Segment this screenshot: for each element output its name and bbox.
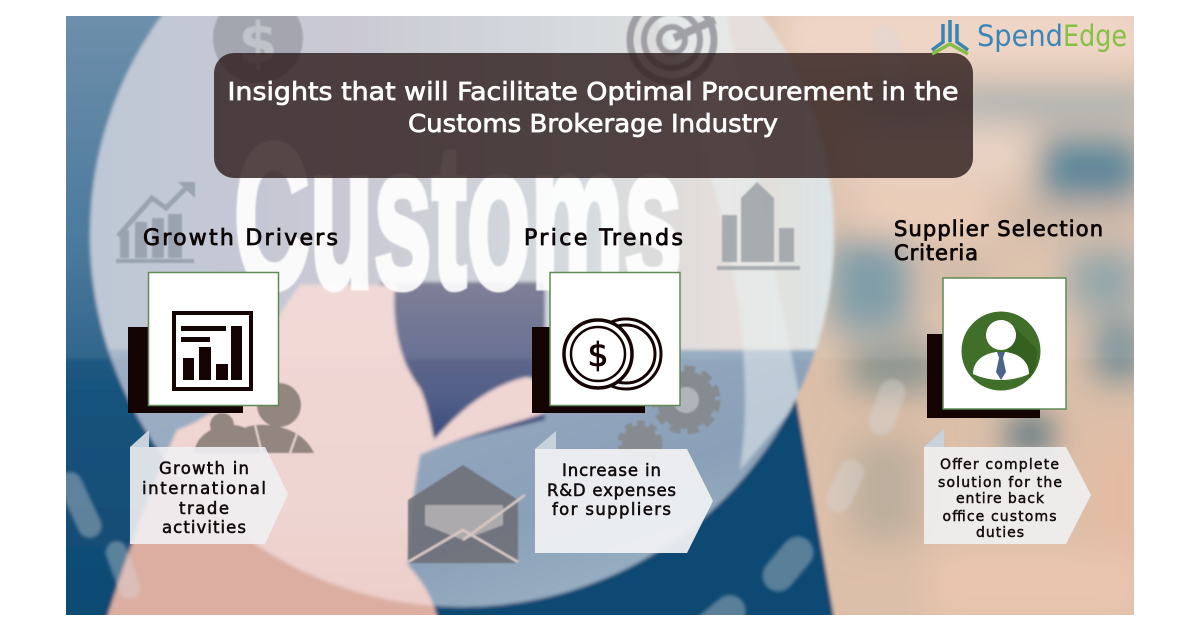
hand seen through the dial: [166, 282, 548, 608]
hand outside the dial: [104, 461, 441, 615]
faded icon: gears: [620, 369, 717, 463]
upper lighter band of the photo: [50, 0, 1150, 359]
SpendEdge logo: Spend: [977, 19, 1063, 53]
dial circle: [80, 0, 850, 627]
title text: Insights that will Facilitate Optimal Procurement in the: [228, 77, 958, 106]
callout: selection criteria: duties: [976, 525, 1024, 541]
column: Growth Drivers: [128, 226, 338, 544]
callout: growth driver: international: [142, 479, 266, 498]
card shadow block: [927, 334, 1040, 418]
heading: Supplier Selection Criteria: [894, 217, 1103, 265]
callout: price trend: [535, 431, 713, 553]
callout: price trend: Increase in: [562, 461, 661, 480]
faded icon: growth chart: [116, 182, 195, 263]
heading: Supplier Selection Criteria: Criteria: [894, 241, 978, 265]
suit seen through the dial: [380, 282, 545, 445]
callout: selection criteria: entire back: [956, 491, 1045, 507]
faded icon: target: [630, 0, 715, 82]
callout: growth driver: activities: [162, 518, 246, 537]
column: Price Trends: [524, 226, 713, 553]
callout: price trend: for suppliers: [552, 500, 671, 519]
title banner: [214, 53, 973, 178]
callout: growth driver: Growth in: [159, 459, 249, 478]
callout: selection criteria: [924, 429, 1091, 544]
card shadow block: [128, 327, 243, 413]
icon: dollar coins: $: [588, 335, 608, 374]
icon card: [148, 272, 278, 406]
callout: growth driver: [130, 430, 288, 544]
SpendEdge logo: [932, 19, 1127, 54]
title text: [228, 77, 958, 138]
pale streaks on the right of the dial: [658, 16, 800, 470]
title text: Customs Brokerage Industry: [408, 109, 778, 138]
faded icon: office building: [717, 182, 800, 270]
heading: Price Trends: Price Trends: [524, 226, 683, 251]
big customs word: Customs: [234, 102, 682, 331]
decorative capsules: [54, 23, 909, 627]
icon: supplier person: [962, 312, 1040, 390]
callout: price trend: R&D expenses: [547, 481, 676, 500]
callout: selection criteria: office customs: [942, 509, 1056, 525]
callout: selection criteria: Offer complete: [940, 457, 1059, 473]
icon: bar chart report: [174, 313, 251, 389]
column: Supplier Selection Criteria: [894, 217, 1103, 544]
faded icon: business people: [194, 383, 314, 453]
callout: growth driver: trade: [179, 499, 229, 518]
heading: Growth Drivers: Growth Drivers: [143, 226, 338, 251]
suit outside the dial: [432, 398, 836, 615]
outside-of-dial scene: [760, 16, 1134, 615]
faded icon: dollar coin: $: [239, 11, 277, 76]
SpendEdge logo: Edge: [1063, 19, 1127, 53]
card shadow block: [532, 327, 645, 413]
icon card: [550, 272, 680, 406]
faded icon: envelope: [408, 465, 525, 563]
heading: Supplier Selection Criteria: Supplier Selection: [894, 217, 1103, 241]
icon card: [943, 278, 1066, 409]
faded icon: dollar coin: [212, 16, 304, 60]
icon: dollar coins: [564, 319, 661, 389]
callout: selection criteria: solution for the: [938, 475, 1062, 491]
